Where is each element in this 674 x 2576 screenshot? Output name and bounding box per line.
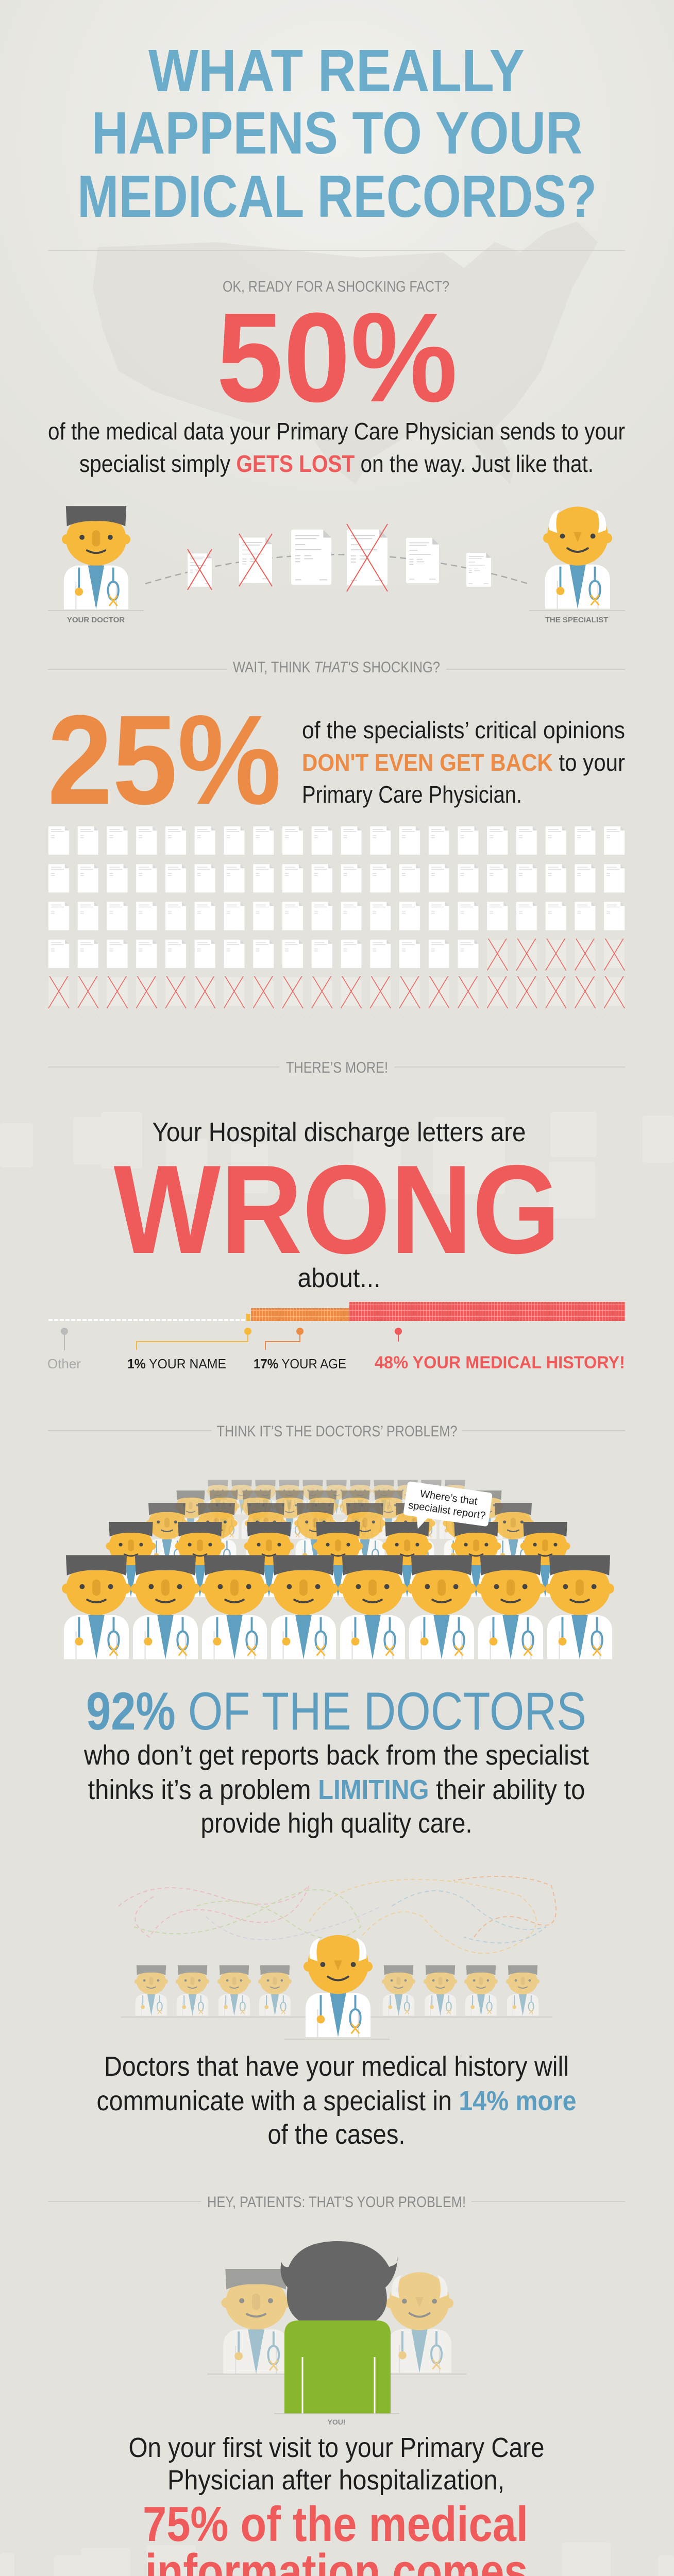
- illustration: crowd of doctors: [62, 1480, 614, 1659]
- section heading: doctors' problem: THINK IT’S THE DOCTORS’ PROBLEM?: [216, 1423, 458, 1440]
- text: 50% explanation: [48, 418, 625, 477]
- callout: speech bubble: Where’s that: [419, 1488, 478, 1507]
- text: 92% explanation: [83, 1740, 589, 1839]
- title: [77, 37, 597, 230]
- text: 14% more: Doctors that have your medical history will: [104, 2051, 569, 2082]
- icon: the specialist: [543, 506, 612, 609]
- text: 25% explanation: Primary Care Physician.: [302, 781, 522, 808]
- headline: 92% of the doctors: 92% OF THE DOCTORS: [86, 1682, 586, 1741]
- text: 14% more: of the cases.: [268, 2119, 405, 2150]
- text: 14% more: [97, 2051, 576, 2150]
- illustration: lost records between doctors: YOUR DOCTOR: [67, 616, 125, 624]
- illustration: patient between doctors: YOU!: [328, 2418, 345, 2426]
- title: WHAT REALLY: [148, 37, 525, 104]
- icon: your doctor: [62, 506, 130, 609]
- callout: speech bubble: specialist report?: [408, 1500, 486, 1521]
- section heading: there's more: THERE’S MORE!: [286, 1059, 388, 1076]
- text: first visit: Physician after hospitalization,: [167, 2465, 504, 2496]
- papers: [188, 553, 212, 587]
- text: 25% explanation: DON'T EVEN GET BACK to your: [302, 749, 625, 776]
- section heading: shocking fact: OK, READY FOR A SHOCKING FACT?: [223, 278, 449, 295]
- illustration: lost records between doctors: THE SPECIALIST: [545, 616, 608, 624]
- callout: speech bubble: [401, 1481, 493, 1538]
- title: HAPPENS TO YOUR: [92, 99, 582, 166]
- text: 25% explanation: of the specialists’ critical opinions: [302, 717, 625, 743]
- section heading: patients' problem: HEY, PATIENTS: THAT’S YOUR PROBLEM!: [207, 2194, 466, 2211]
- chart: error bar: Other: [47, 1356, 81, 1371]
- section heading: wait: WAIT, THINK THAT'S SHOCKING?: [233, 659, 440, 676]
- text: 14% more: communicate with a specialist in 14% more: [97, 2086, 576, 2116]
- text: 25% explanation: [302, 717, 625, 808]
- text: discharge letters: Your Hospital discharge letters are: [153, 1117, 526, 1147]
- background: US map: [93, 222, 598, 484]
- text: 50% explanation: specialist simply GETS LOST on the way. Just like that.: [79, 450, 594, 477]
- chart: document grid 75 received, 25 lost: [48, 825, 633, 1014]
- illustration: lost records between doctors: [48, 506, 625, 624]
- chart: error bar: [47, 1302, 625, 1372]
- text: 92% explanation: thinks it’s a problem LIMITING their ability to: [88, 1774, 585, 1805]
- headline: 75% from the patient: [113, 2497, 558, 2576]
- text: about: about...: [298, 1263, 380, 1293]
- chart: error bar: 17% YOUR AGE: [254, 1356, 346, 1371]
- big stat 25%: 25%: [47, 689, 281, 831]
- illustration: communication scribbles and doctors: [119, 1876, 556, 2039]
- text: 92% explanation: who don’t get reports back from the specialist: [83, 1740, 589, 1771]
- chart: error bar: 48% YOUR MEDICAL HISTORY!: [375, 1353, 625, 1372]
- text: first visit: [129, 2432, 544, 2496]
- big stat 50%: 50%: [216, 286, 458, 429]
- background documents: [0, 2543, 674, 2576]
- illustration: patient between doctors: [207, 2241, 466, 2426]
- text: first visit: On your first visit to your Primary Care: [129, 2432, 544, 2463]
- chart: error bar: 1% YOUR NAME: [127, 1356, 226, 1371]
- headline: 75% from the patient: 75% of the medical: [143, 2497, 528, 2552]
- background documents: [0, 1112, 674, 1218]
- text: 92% explanation: provide high quality care.: [201, 1808, 472, 1839]
- big word WRONG: WRONG: [113, 1139, 561, 1280]
